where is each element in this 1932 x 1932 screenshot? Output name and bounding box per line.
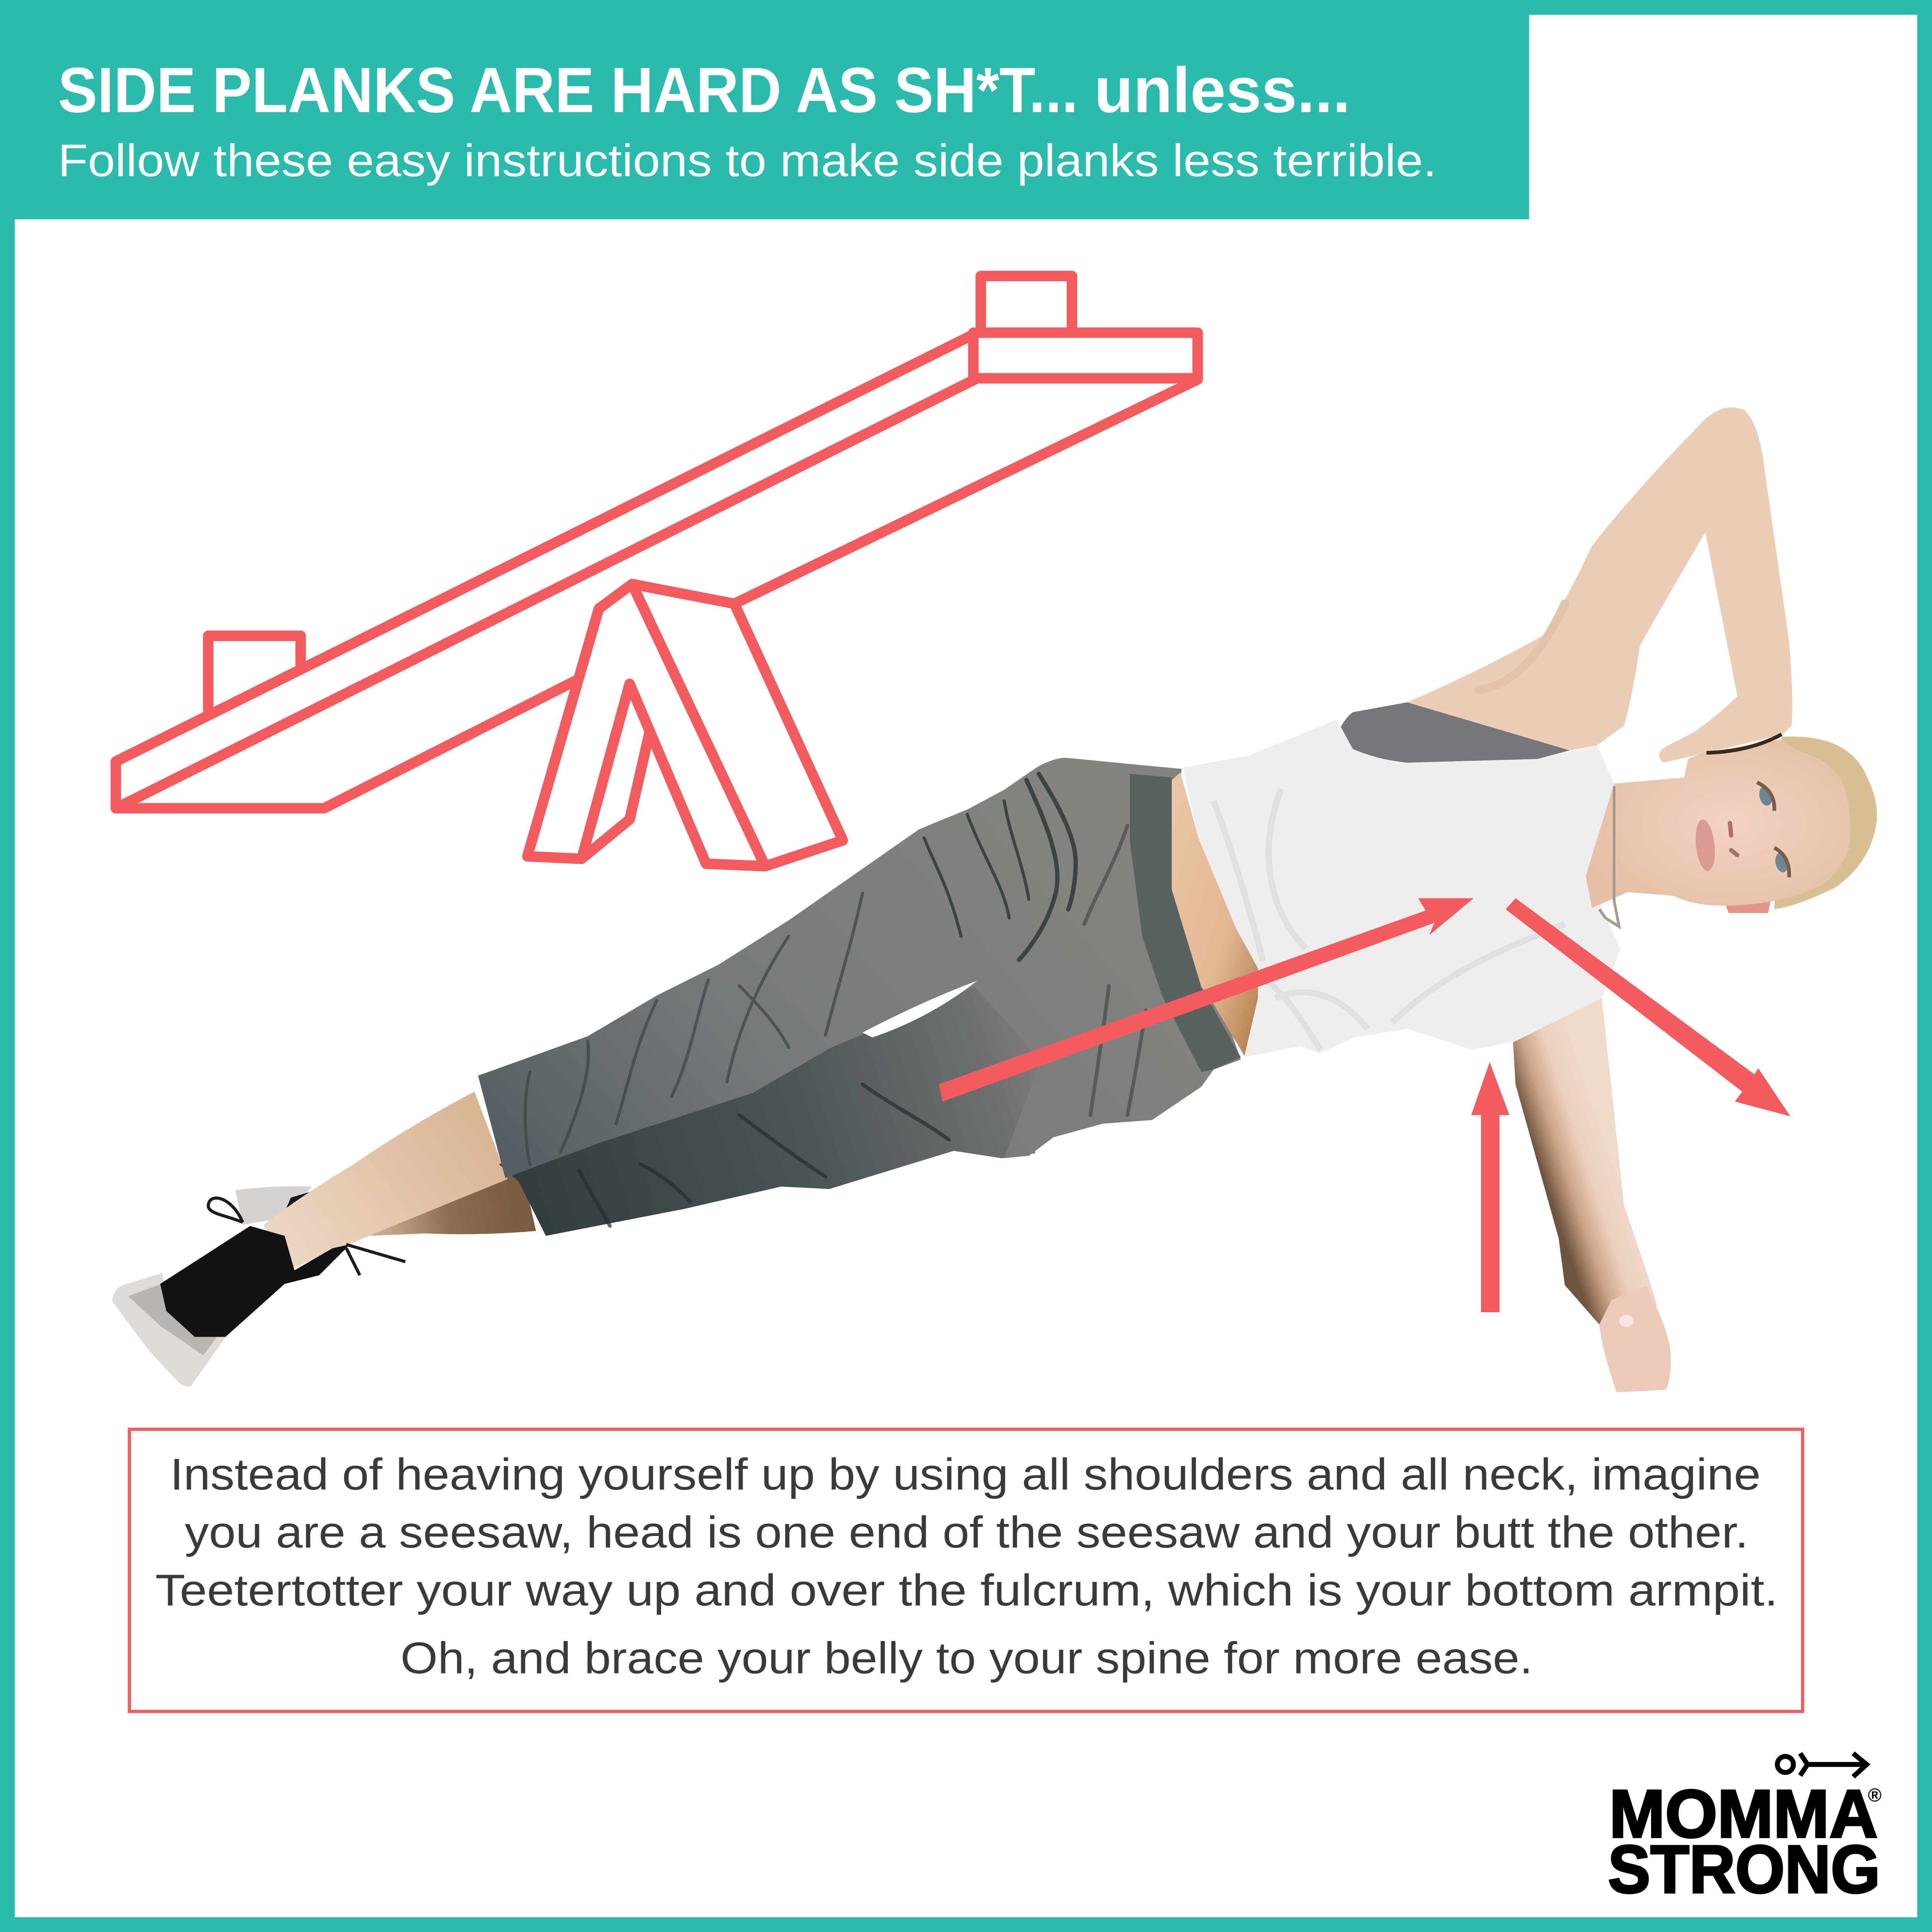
thumbnail: [1619, 1315, 1634, 1327]
logo word STRONG: STRONG: [1608, 1832, 1880, 1907]
waistband: [1130, 774, 1241, 1072]
subtitle: Follow these easy instructions to make side planks less terrible.: [58, 135, 1437, 186]
face and neck: [1586, 739, 1850, 908]
raised arm and hand: [1407, 407, 1793, 763]
seesaw illustration: [116, 276, 1197, 866]
upper leg pants and hip: [478, 758, 1241, 1178]
lower leg pants: [499, 973, 1060, 1236]
pants wrinkles: [525, 774, 1146, 1226]
hand shadow line on hair: [1706, 735, 1782, 753]
right seat block: [981, 276, 1072, 329]
ear: [1725, 901, 1770, 913]
gap between the legs: [862, 981, 977, 1037]
shoe inner patch: [128, 1284, 217, 1355]
belly skin: [1172, 772, 1258, 1056]
logo icon: ring and arrow: [1777, 1753, 1867, 1777]
necklace: [1599, 786, 1619, 927]
arrow: pointing up to armpit: [1471, 1062, 1509, 1312]
instruction line 2: you are a seesaw, head is one end of the seesaw and your butt the other.: [185, 1508, 1748, 1557]
shoe: [112, 1273, 226, 1386]
shoe laces: [208, 1198, 405, 1275]
lower shin shadow: [370, 1170, 536, 1236]
near shin: [264, 1092, 508, 1269]
title: unless...: [1094, 54, 1350, 126]
lower supporting arm: [1513, 998, 1657, 1325]
white t-shirt: [1183, 719, 1620, 1057]
instruction line 1: Instead of heaving yourself up by using all shoulders and all neck, imagine: [170, 1450, 1761, 1499]
fulcrum: [527, 584, 843, 866]
logo: Momma Strong: [1608, 1753, 1881, 1907]
lips: [1693, 818, 1717, 872]
armpit shading: [1479, 604, 1565, 690]
eyes: [1757, 782, 1790, 877]
instruction line 3: Teetertotter your way up and over the fulcrum, which is your bottom armpit.: [155, 1566, 1778, 1615]
hair: [1774, 736, 1877, 909]
arrow: along the body to armpit: [939, 898, 1474, 1102]
arrow: from armpit to lower right: [1506, 898, 1790, 1116]
left seat block: [208, 636, 301, 710]
black sock: [160, 1226, 350, 1337]
logo word MOMMA: MOMMA: [1609, 1776, 1878, 1852]
shirt folds: [1214, 789, 1565, 1050]
far shoe: [235, 1186, 312, 1225]
registered mark: ®: [1868, 1785, 1881, 1806]
instruction text box: [129, 1429, 1803, 1711]
fist: [1599, 1286, 1671, 1392]
header banner: [0, 0, 1529, 219]
sports bra: [1338, 702, 1570, 763]
title: SIDE PLANKS ARE HARD AS SH*T...: [58, 54, 1078, 126]
nose: [1730, 823, 1737, 855]
seesaw beam: [116, 333, 1197, 808]
far sock: [283, 1190, 315, 1220]
instruction line 4: Oh, and brace your belly to your spine for more ease.: [400, 1633, 1533, 1683]
photo: woman in side plank: [112, 407, 1877, 1392]
